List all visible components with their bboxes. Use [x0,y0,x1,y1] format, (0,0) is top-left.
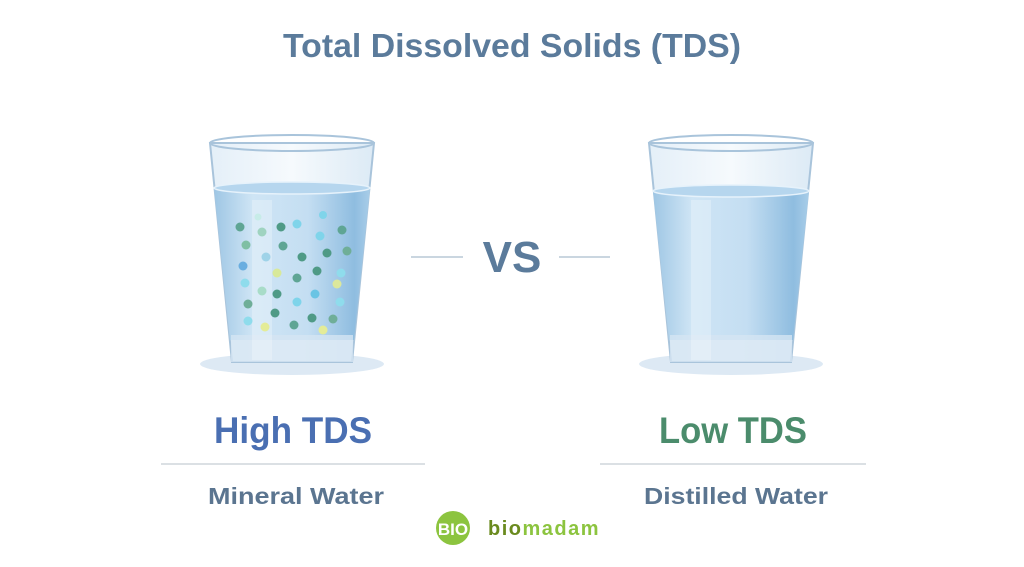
heading: Low TDS: Low TDS [659,410,807,451]
logo: biomadam: biomadam [488,518,600,540]
logo: biomadam [436,511,600,545]
glass: low TDS [639,135,823,375]
glass: high TDS [200,135,384,375]
logo: biomadam: BIO [438,520,468,539]
dots: dissolved solids [236,211,352,334]
heading: High TDS: High TDS [214,410,372,451]
subtitle: Mineral Water: Mineral Water [208,483,384,509]
subtitle: Distilled Water: Distilled Water [644,483,828,509]
title: Total Dissolved Solids (TDS) [283,27,741,64]
VS label: VS [483,233,541,282]
